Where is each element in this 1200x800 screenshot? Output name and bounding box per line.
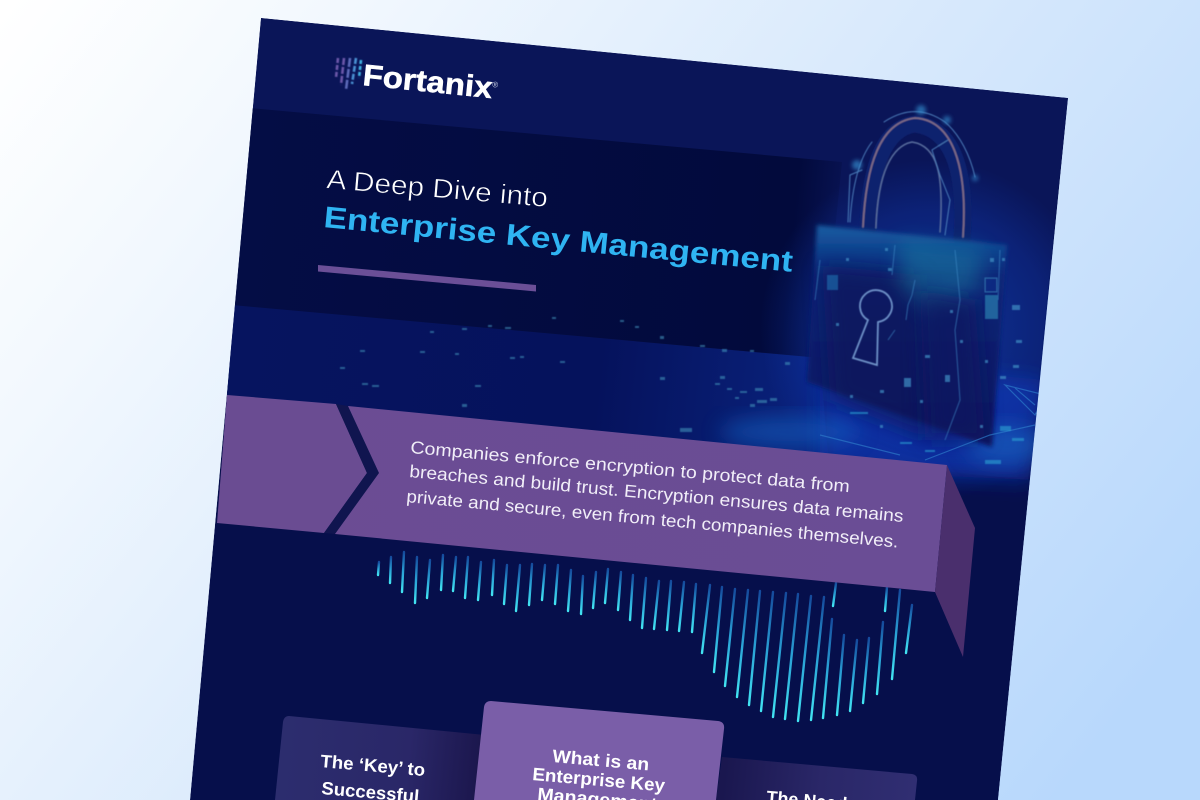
header band xyxy=(227,18,1068,480)
intro text: Companies enforce encryption to protect data from xyxy=(410,437,851,496)
right floor glow xyxy=(820,360,1045,480)
lock glow xyxy=(770,174,1054,484)
chevron gap xyxy=(324,404,379,534)
registered mark: ® xyxy=(492,80,499,90)
intro text: private and secure, even from tech companies themselves. xyxy=(406,486,899,552)
card: right xyxy=(716,757,917,800)
title xyxy=(322,164,794,279)
card text: left xyxy=(320,751,426,800)
logo wordmark: Fortanix xyxy=(361,59,494,105)
intro text xyxy=(406,437,905,552)
shackle glow points xyxy=(852,105,978,181)
hero lower circuit floor xyxy=(227,305,828,453)
title underline xyxy=(318,265,536,292)
shackle xyxy=(848,112,975,238)
card text: centre: Enterprise Key xyxy=(532,764,666,796)
logo icon xyxy=(336,58,361,90)
lock body shadow xyxy=(822,265,930,440)
lock body dots xyxy=(827,248,1022,428)
padlock illustration xyxy=(807,105,1045,464)
logo xyxy=(336,58,499,105)
glowing floor near lock xyxy=(720,416,860,448)
floor circuit dots xyxy=(340,317,790,432)
lock top teal glow xyxy=(900,240,985,312)
keyhole xyxy=(853,290,892,365)
lock right dark area xyxy=(920,290,985,440)
ribbon left segment xyxy=(217,395,367,533)
dark title band xyxy=(232,108,842,358)
lock body xyxy=(807,225,1007,447)
lock circuit traces xyxy=(815,245,1000,440)
card text: centre: What is an xyxy=(552,746,650,774)
title line 1: A Deep Dive into xyxy=(325,164,549,213)
card text: left: The ‘Key’ to xyxy=(320,751,426,780)
key-shaped waveform bars xyxy=(378,552,912,721)
right circuit traces xyxy=(820,385,1045,460)
page base navy xyxy=(190,18,1068,800)
ribbon fold xyxy=(935,465,975,657)
floor bright marks xyxy=(850,412,1024,464)
title line 2: Enterprise Key Management xyxy=(322,201,794,279)
ribbon main panel xyxy=(335,406,947,592)
card: left xyxy=(275,716,485,800)
card text: centre xyxy=(532,746,666,800)
infographic page xyxy=(190,18,1100,800)
card: centre xyxy=(474,701,724,800)
intro text: breaches and build trust. Encryption ensures data remains xyxy=(409,461,905,526)
